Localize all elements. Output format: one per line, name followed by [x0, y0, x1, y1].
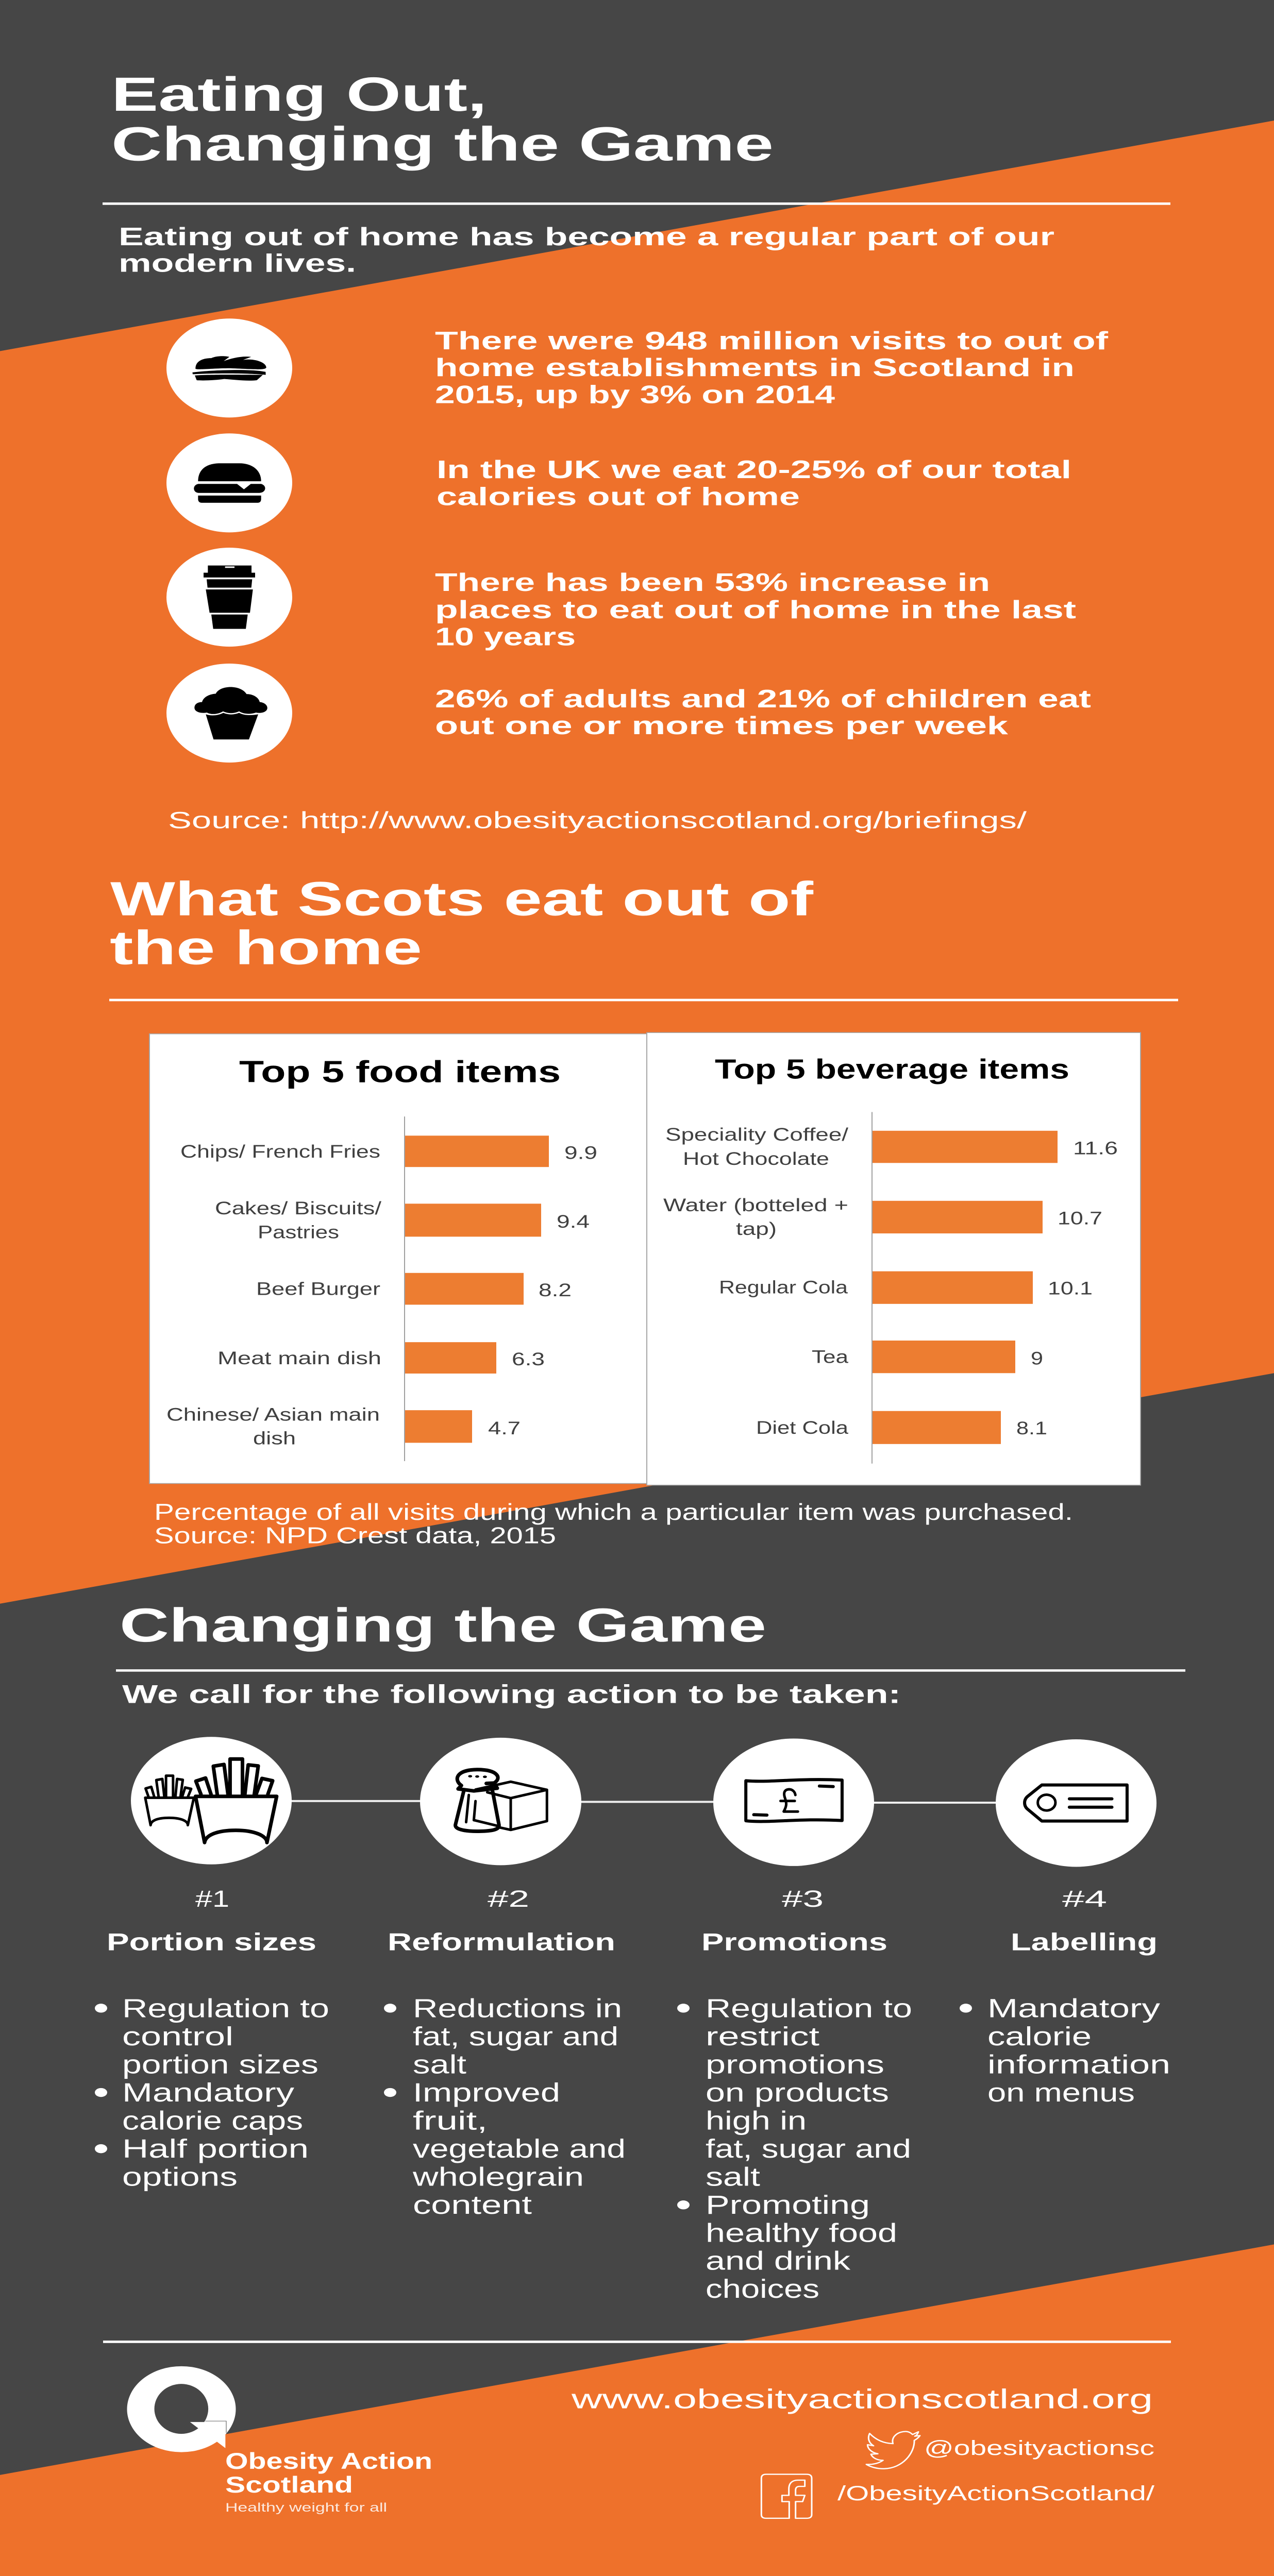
- website url: www.obesityactionscotland.org: [571, 2383, 1153, 2414]
- beverage labels: [663, 1125, 1118, 1438]
- list: promotions: and drink: [706, 2246, 851, 2276]
- action headings: [107, 1928, 1158, 1956]
- heading: changing the game: Changing the Game: [120, 1599, 766, 1652]
- list: reformulation: [384, 1994, 626, 2220]
- action headings: Reformulation: [388, 1928, 615, 1956]
- food labels: Beef Burger: [256, 1279, 380, 1299]
- food labels: Meat main dish: [217, 1348, 381, 1368]
- bar chart: food bars: [405, 1136, 549, 1443]
- beverage labels: 8.1: [1016, 1418, 1047, 1438]
- twitter handle: @obesityactionsc: [924, 2436, 1154, 2460]
- food labels: Chinese/ Asian main: [166, 1405, 380, 1425]
- logo wordmark: [225, 2448, 432, 2514]
- heading: what scots eat: the home: [110, 921, 422, 975]
- panel: food chart: [149, 1034, 647, 1484]
- icon: price tag labelling: [996, 1739, 1156, 1867]
- food labels: 4.7: [488, 1418, 521, 1438]
- logo wordmark: Scotland: [225, 2472, 353, 2498]
- stat: frequency: [435, 684, 1091, 740]
- icon: coffee cup: [166, 548, 292, 647]
- beverage labels: 9: [1031, 1349, 1043, 1369]
- food labels: Pastries: [258, 1223, 339, 1242]
- list: labelling: on menus: [987, 2078, 1135, 2107]
- list: reformulation: vegetable and: [413, 2134, 626, 2163]
- heading: what scots eat: [110, 872, 814, 975]
- beverage labels: 10.1: [1048, 1279, 1093, 1299]
- stat: places to eat: There has been 53% increase in: [435, 568, 990, 597]
- bar chart: beverage bars: [872, 1131, 1058, 1444]
- list: promotions: healthy food: [706, 2218, 897, 2248]
- list: labelling: [960, 1994, 1170, 2107]
- beverage labels: 11.6: [1073, 1139, 1118, 1159]
- food labels: 6.3: [512, 1350, 545, 1369]
- food labels: 8.2: [539, 1280, 572, 1300]
- action headings: Promotions: [701, 1928, 887, 1956]
- stat: visits: There were 948 million visits to out of: [435, 326, 1109, 354]
- list: labelling: calorie: [987, 2022, 1092, 2052]
- title: Changing the Game: [111, 117, 774, 171]
- beverage labels: Water (botteled +: [663, 1195, 848, 1215]
- list: promotions: fat, sugar and: [706, 2134, 911, 2163]
- panel: beverage chart: [647, 1032, 1141, 1485]
- background: middle dark diagonal band: [0, 1373, 1274, 2475]
- action numbers: [195, 1886, 1107, 1912]
- chart caption: [154, 1499, 1073, 1548]
- icon: burger: [166, 433, 292, 532]
- logo: Obesity Action Scotland: [127, 2366, 432, 2514]
- beverage labels: Tea: [812, 1347, 849, 1367]
- stat: visits: home establishments in Scotland in: [435, 353, 1075, 382]
- list: labelling: information: [987, 2050, 1170, 2079]
- list: portion sizes: Mandatory: [122, 2078, 295, 2107]
- icon: fries portion sizes: [131, 1737, 292, 1865]
- list: labelling: Mandatory: [987, 1994, 1161, 2023]
- beverage labels: Diet Cola: [756, 1418, 849, 1438]
- list: portion sizes: Half portion: [122, 2134, 309, 2163]
- list: promotions: [677, 1994, 912, 2303]
- food labels: Cakes/ Biscuits/: [215, 1198, 382, 1218]
- list: portion sizes: calorie caps: [122, 2106, 303, 2136]
- icon: salt shaker and sugar cube: [420, 1738, 581, 1865]
- panel: eating out statistics: [166, 318, 1109, 762]
- list: portion sizes: Regulation to: [122, 1994, 329, 2023]
- list: reformulation: Improved: [413, 2078, 560, 2107]
- list: promotions: salt: [706, 2162, 760, 2192]
- list: portion sizes: portion sizes: [122, 2050, 318, 2079]
- food labels: Chips/ French Fries: [180, 1142, 380, 1162]
- beverage labels: Regular Cola: [719, 1278, 848, 1297]
- stat: places to eat: 10 years: [435, 622, 576, 651]
- action headings: Portion sizes: [107, 1928, 316, 1956]
- food labels: dish: [253, 1429, 296, 1448]
- list: reformulation: wholegrain: [412, 2162, 584, 2192]
- chart title: beverage: Top 5 beverage items: [715, 1054, 1069, 1084]
- logo wordmark: Obesity Action: [225, 2448, 432, 2474]
- connector lines: [289, 1800, 998, 1804]
- food labels: 9.9: [564, 1143, 597, 1163]
- action numbers: #3: [782, 1886, 824, 1912]
- chart caption: Percentage of all visits during which a particular item was purchased.: [154, 1499, 1073, 1525]
- chart title: food: Top 5 food items: [239, 1055, 561, 1089]
- source text: Source: http://www.obesityactionscotland.org/briefings/: [168, 807, 1027, 834]
- title rule: [103, 202, 1170, 205]
- stat: frequency: out one or more times per week: [435, 711, 1009, 740]
- icon: facebook: [761, 2475, 812, 2518]
- food labels: 9.4: [557, 1212, 590, 1232]
- action headings: Labelling: [1011, 1928, 1158, 1956]
- beverage labels: Hot Chocolate: [683, 1149, 829, 1169]
- action numbers: #4: [1062, 1886, 1107, 1912]
- title: [111, 67, 774, 171]
- list: promotions: Regulation to: [706, 1994, 912, 2023]
- heading: what scots eat: What Scots eat out of: [110, 872, 814, 926]
- list: promotions: restrict: [706, 2022, 819, 2052]
- action numbers: #2: [488, 1886, 529, 1912]
- logo wordmark: Healthy weight for all: [225, 2500, 387, 2514]
- list: promotions: promotions: [706, 2050, 884, 2079]
- logo mark: Q: [127, 2366, 236, 2452]
- icon: muffin: [166, 664, 292, 762]
- icon: twitter bird: [866, 2432, 920, 2469]
- section rule: [116, 1669, 1185, 1672]
- list: reformulation: fruit,: [413, 2106, 488, 2136]
- list: reformulation: fat, sugar and: [413, 2022, 618, 2052]
- stat: frequency: 26% of adults and 21% of children eat: [435, 684, 1091, 713]
- stat: calories: calories out of home: [437, 482, 800, 511]
- stat: places to eat: [435, 568, 1076, 651]
- beverage labels: Speciality Coffee/: [665, 1125, 849, 1145]
- subheading: call to action: We call for the following action to be taken:: [122, 1681, 901, 1709]
- list: reformulation: Reductions in: [413, 1994, 622, 2023]
- chart caption: Source: NPD Crest data, 2015: [154, 1522, 556, 1548]
- stat: visits: 2015, up by 3% on 2014: [435, 380, 835, 409]
- list: reformulation: salt: [413, 2050, 466, 2079]
- background: top dark diagonal: [0, 0, 1274, 351]
- facebook handle: /ObesityActionScotland/: [837, 2482, 1155, 2505]
- list: promotions: on products: [706, 2078, 889, 2107]
- list: portion sizes: [95, 1994, 329, 2192]
- footer rule: [103, 2341, 1171, 2343]
- stat: places to eat: places to eat out of home in the last: [435, 595, 1076, 623]
- icon: banknote promotions: [713, 1738, 874, 1866]
- stat: calories: [437, 455, 1071, 511]
- stat: calories: In the UK we eat 20-25% of our total: [437, 455, 1071, 484]
- intro text: modern lives.: [119, 249, 356, 277]
- intro text: Eating out of home has become a regular part of our: [119, 222, 1054, 250]
- intro text: [119, 222, 1054, 277]
- section rule: [109, 999, 1178, 1001]
- title: Eating Out,: [111, 67, 487, 121]
- beverage labels: 10.7: [1058, 1209, 1102, 1229]
- list: promotions: choices: [706, 2274, 819, 2303]
- food labels: [166, 1142, 597, 1448]
- list: promotions: high in: [706, 2106, 807, 2136]
- list: portion sizes: options: [122, 2162, 238, 2192]
- list: promotions: Promoting: [706, 2191, 870, 2220]
- list: reformulation: content: [413, 2191, 532, 2220]
- stat: visits: [435, 326, 1109, 409]
- list: portion sizes: control: [122, 2022, 233, 2052]
- icon: sandwich: [166, 318, 292, 417]
- beverage labels: tap): [736, 1219, 777, 1239]
- action numbers: #1: [195, 1886, 229, 1912]
